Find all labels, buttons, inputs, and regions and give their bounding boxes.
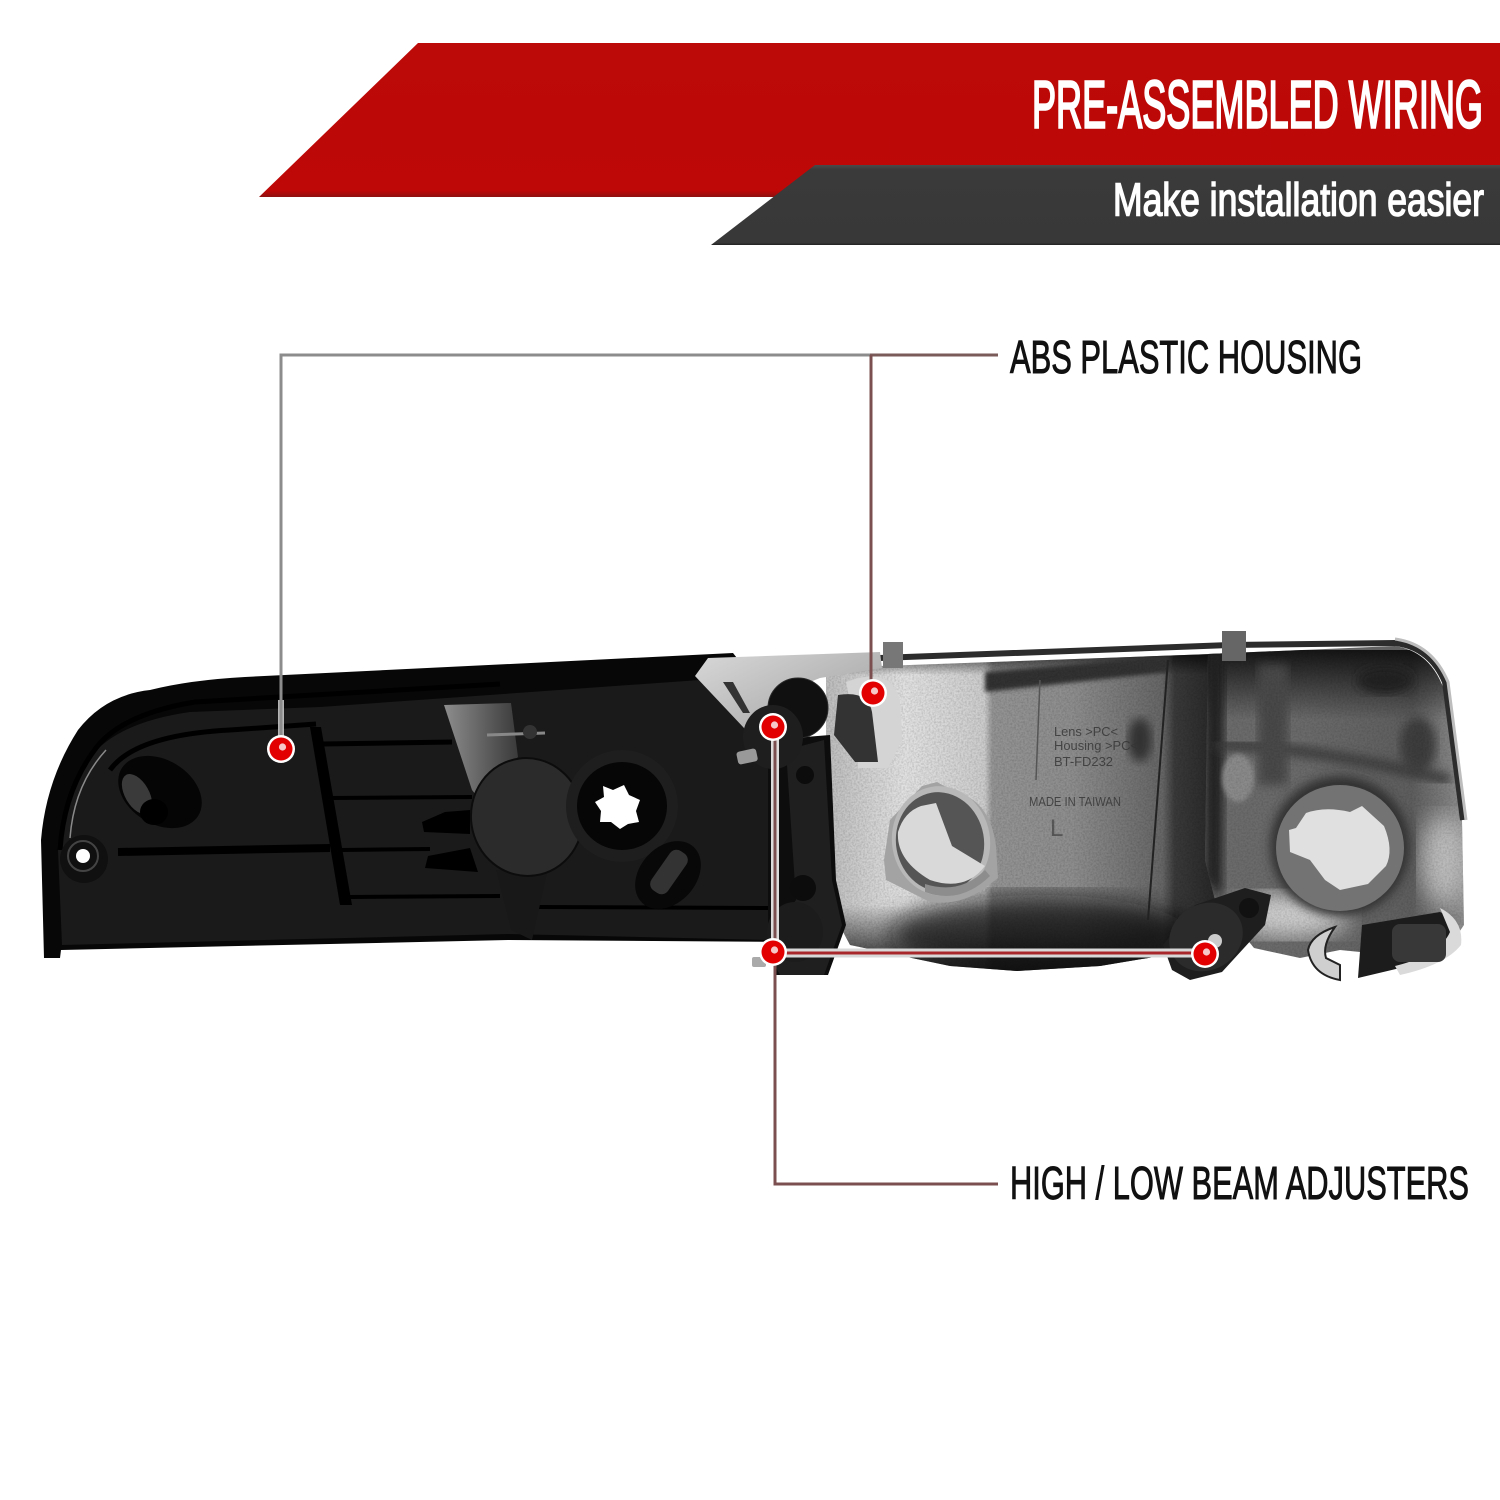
- centre bulb ring: [883, 778, 999, 904]
- banner: dark sub-heading ribbon: [711, 165, 1500, 245]
- adjuster arm left: [736, 678, 846, 975]
- star bulb socket: [566, 750, 678, 862]
- leader lines: beam adjusters: [775, 728, 1205, 1184]
- adjuster right: [1157, 888, 1271, 985]
- leader lines: ABS plastic housing: [281, 355, 998, 749]
- callout dot: housing clip: [859, 679, 887, 707]
- mounting stud left: [105, 741, 215, 843]
- right bulb hole: [1270, 776, 1410, 916]
- infographic canvas: [41, 43, 1500, 1200]
- banner: red heading ribbon: [259, 43, 1500, 245]
- socket clip: [834, 676, 902, 768]
- callout dot: lower adjuster: [759, 938, 787, 966]
- molded text: MADE IN TAIWAN: [1029, 794, 1121, 809]
- left housing: black bumper light section: [41, 653, 790, 958]
- molded text: [1029, 724, 1138, 842]
- molded text: Lens >PC<: [1054, 724, 1118, 739]
- centre reflector housing: [815, 650, 1225, 980]
- molded text: Housing >PC<: [1054, 738, 1138, 753]
- flap bracket: [444, 703, 518, 800]
- callout dot: left housing: [267, 735, 295, 763]
- callout dot: top adjuster: [759, 713, 787, 741]
- product: headlight rear view: [41, 631, 1469, 985]
- bottom tube connector: [1308, 908, 1461, 980]
- top wire with clips: [880, 631, 1466, 820]
- mounting stud right: [622, 828, 714, 922]
- right reflector housing: [1205, 646, 1469, 980]
- metal bracket: [695, 652, 882, 745]
- molded text: BT-FD232: [1054, 754, 1113, 769]
- screw hole: [60, 835, 108, 883]
- molded text: L: [1050, 815, 1063, 842]
- round rubber cap: [463, 751, 591, 883]
- panel ribs: [118, 727, 770, 908]
- lower flap: [496, 870, 547, 940]
- callout dot: right adjuster: [1191, 940, 1219, 968]
- small clip: [487, 725, 545, 739]
